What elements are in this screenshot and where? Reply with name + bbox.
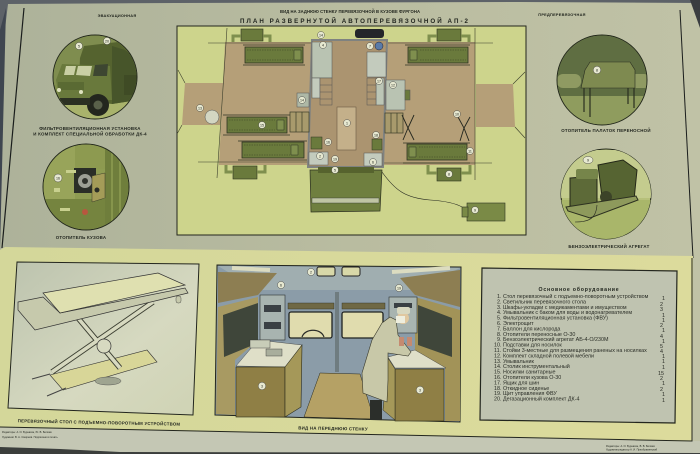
stretcher beds: [223, 45, 470, 163]
list quantities: 2: [660, 302, 663, 308]
scissor lift: [52, 302, 153, 372]
right vestibule: [476, 84, 515, 127]
number marker: 9: [587, 158, 589, 162]
left wall: [218, 272, 277, 303]
list items: 7. Баллон для кислорода: [497, 326, 560, 332]
heading: left section: ЭВАКУАЦИОННАЯ: [98, 13, 136, 18]
panel: circle generator: [560, 149, 652, 240]
list items: 17. Ящик для шин: [494, 380, 539, 386]
list items: 16. Отопители кузова О-30: [494, 375, 561, 381]
plan number markers: 14: [319, 33, 323, 37]
caption: generator: БЕНЗОЭЛЕКТРИЧЕСКИЙ АГРЕГАТ: [568, 244, 650, 249]
heaters with hoses: [226, 29, 470, 181]
list items: 8. Отопители переносные О-30: [497, 332, 575, 338]
list quantities: 1: [662, 339, 665, 345]
list items: 1. Стол перевязочный с подъемно-поворотным устройством: [497, 293, 649, 300]
list quantities: 1: [662, 318, 665, 324]
plan number markers: 17: [377, 79, 381, 83]
list items: 2. Светильник перевязочного стола: [497, 299, 586, 305]
washstand: [205, 110, 219, 124]
list items: 4. Умывальник с баком для воды и водонагревателем: [497, 310, 632, 316]
van body floor: [308, 40, 387, 167]
table top: [43, 273, 185, 313]
plan number markers: 18: [374, 133, 378, 137]
list quantities: 1: [662, 313, 665, 319]
list items: [494, 293, 649, 403]
interior number markers: 2: [310, 270, 312, 274]
list quantities: 1: [662, 381, 665, 387]
number marker: 8: [596, 68, 598, 72]
ceiling lamps and light covers: [232, 267, 450, 276]
list quantities: 1: [662, 398, 665, 404]
number markers: [75, 37, 111, 50]
medic figure: [362, 307, 412, 420]
interior number markers: [258, 268, 424, 394]
list quantities: 15: [658, 371, 664, 377]
windows: [289, 312, 383, 338]
steering wheel: [302, 330, 324, 337]
panel: dressing table illustration: [8, 262, 199, 415]
plan number markers: 13: [198, 106, 202, 110]
control panels: [260, 295, 417, 340]
list quantities: 4: [660, 349, 663, 355]
dark photo edges: [0, 0, 700, 250]
imprint left: Редакторы: А. И. Бурназян, Ю. В. Беляев: [2, 430, 52, 434]
panel: plan of deployed unit: [177, 26, 526, 235]
lower yellow panel: [0, 247, 693, 441]
plan number markers: 10: [455, 112, 459, 116]
imprint left: [2, 430, 58, 439]
fold-down seats: [311, 137, 382, 150]
list items: 15. Носилки санитарные: [494, 370, 556, 376]
panel: interior front wall view: [215, 265, 461, 422]
generator cable: [382, 172, 462, 207]
imprint left: Художник: В. А. Смирнов. Подписано в печать: [2, 435, 58, 439]
caption: filter unit: И КОМПЛЕКТ СПЕЦИАЛЬНОЙ ОБРАБОТКИ ДК-4: [33, 132, 147, 136]
generator: [462, 203, 505, 221]
caption: interior: ВИД НА ПЕРЕДНЮЮ СТЕНКУ: [298, 425, 368, 432]
centre pillar: [335, 292, 339, 372]
caption: filter unit: ФИЛЬТРОВЕНТИЛЯЦИОННАЯ УСТАНОВКА: [39, 126, 141, 131]
left vestibule: [182, 83, 224, 125]
list quantities: 2: [660, 376, 663, 382]
caption: filter unit: [33, 126, 147, 136]
list items: 11. Стойки 3-местные для размещения раненых на носилках: [494, 347, 647, 354]
list items: 12. Комплект складной полевой мебели: [494, 352, 594, 359]
subtitle: ВИД НА ЗАДНЮЮ СТЕНКУ ПЕРЕВЯЗОЧНОЙ В КУЗОВЕ ФУРГОНА: [280, 9, 420, 14]
plan number markers: 12: [391, 83, 395, 87]
left cabinet: [236, 340, 302, 417]
list quantities: 2: [660, 387, 663, 393]
list items: 6. Электрощит: [497, 321, 534, 327]
list items: 14. Столик инструментальный: [494, 363, 570, 370]
plan number markers: 16: [326, 140, 330, 144]
panel: main equipment list: [480, 268, 677, 423]
number marker: 16: [56, 176, 60, 180]
lower paper strip: [0, 427, 700, 454]
rolled blinds: [288, 303, 385, 309]
caption: body heater: ОТОПИТЕЛЬ КУЗОВА: [56, 235, 107, 240]
list quantities: 1: [662, 365, 665, 371]
plan number markers: 15: [260, 123, 264, 127]
plan number markers: 9: [474, 208, 476, 212]
imprint right: Художник-редактор А. И. Преображенский: [606, 448, 658, 452]
panel: circle portable tent heater: [557, 35, 650, 126]
list quantities: 4: [660, 334, 663, 340]
list items: 20. Дегазационный комплект ДК-4: [494, 396, 579, 403]
list quantities: 1: [662, 354, 665, 360]
list items: 18. Откидное сиденье: [494, 386, 549, 392]
list items: 5. Фильтровентиляционная установка (ФВУ): [497, 316, 608, 322]
spare wheel: [355, 29, 384, 38]
plan number markers: 1: [346, 121, 348, 125]
plan number markers: 2: [319, 154, 321, 158]
table frame: [18, 288, 188, 330]
right wall: [400, 270, 460, 307]
ceiling: [218, 266, 460, 290]
coat hangers: [402, 115, 470, 141]
title: ПЛАН РАЗВЕРНУТОЙ АВТОПЕРЕВЯЗОЧНОЙ АП-2: [240, 17, 469, 25]
right border line: [680, 10, 693, 258]
list quantities: 5: [660, 344, 663, 350]
dressing table: [337, 107, 356, 150]
tent floor: [219, 42, 475, 165]
list items: 13. Умывальник: [494, 359, 534, 365]
list items: 3. Шкафы-укладки с медикаментами и имуществом: [497, 305, 627, 311]
plan number markers: 19: [333, 157, 337, 161]
list quantities: 1: [662, 392, 665, 398]
cab: [310, 167, 382, 212]
right cabinet: [383, 350, 446, 421]
list quantities: 3: [660, 307, 663, 313]
plan number markers: 5: [334, 168, 336, 172]
list items: 10. Подставки для носилок: [494, 343, 562, 349]
curtains: [223, 303, 452, 357]
plan number markers: 14: [300, 98, 304, 102]
list items: 19. Щит управления ФВУ: [494, 391, 557, 397]
cabinets and furniture: [297, 42, 410, 166]
caption: table: ПЕРЕВЯЗОЧНЫЙ СТОЛ С ПОДЪЕМНО-ПОВОРОТНЫМ УСТРОЙСТВОМ: [18, 418, 181, 427]
interior number markers: 3: [261, 384, 263, 388]
plan number markers: 8: [448, 172, 450, 176]
list items: 9. Бензоэлектрический агрегат АБ-4-О/230М: [497, 336, 609, 343]
interior number markers: 19: [397, 286, 401, 290]
list quantities: 1: [662, 328, 665, 334]
interior number markers: 3: [419, 388, 421, 392]
left border line: [2, 8, 24, 248]
heading: right section: ПРЕДПЕРЕВЯЗОЧНАЯ: [538, 12, 586, 17]
caption: tent heater: ОТОПИТЕЛЬ ПАЛАТОК ПЕРЕНОСНОЙ: [561, 128, 651, 133]
number markers: 20: [105, 39, 109, 43]
oxygen unit: [375, 42, 383, 50]
list quantities: 1: [662, 359, 665, 365]
panel: circle truck with filter unit: [50, 35, 140, 122]
lower panel bottom rule: [0, 258, 692, 441]
imprint right: Редакторы: А. И. Бурназян, В. В. Беляев: [606, 444, 655, 448]
list heading: Основное оборудование: [539, 286, 619, 293]
plan number markers: [196, 32, 478, 214]
list quantities: [658, 296, 665, 404]
interior number markers: 6: [280, 283, 282, 287]
plan number markers: 7: [369, 44, 371, 48]
ladders: [290, 112, 403, 133]
imprint right: [606, 444, 658, 452]
list quantities: 1: [662, 296, 665, 302]
table base: [50, 350, 157, 390]
plan number markers: 4: [322, 43, 324, 47]
list quantities: 2: [660, 323, 663, 329]
plan number markers: 6: [372, 160, 374, 164]
number markers: 5: [78, 44, 80, 48]
centre table: [304, 373, 374, 419]
lower dark edge: [0, 447, 700, 454]
plan number markers: 11: [468, 149, 472, 153]
panel: circle body heater: [43, 144, 130, 231]
